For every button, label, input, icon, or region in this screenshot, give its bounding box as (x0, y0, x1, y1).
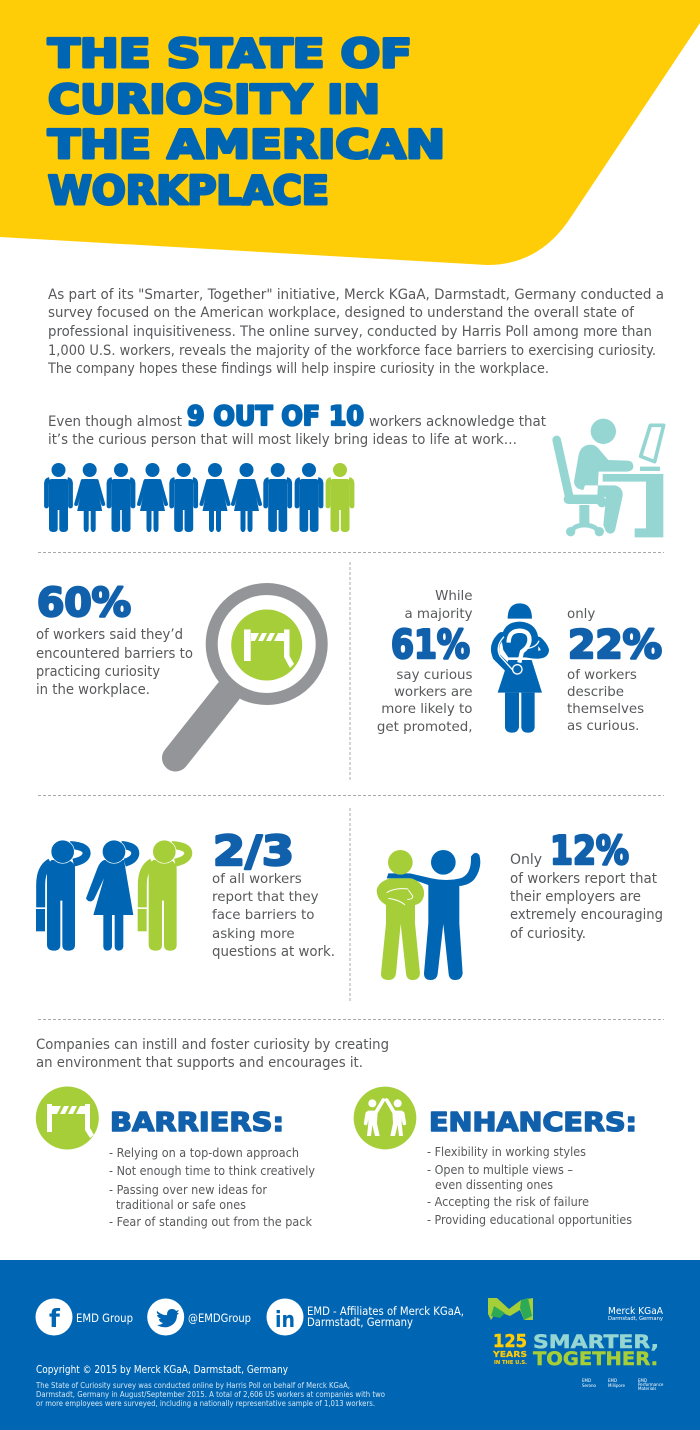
panel: 61% and 22%: 22% (568, 623, 662, 668)
logo: Merck KGaA wordmark: Darmstadt, Germany (608, 1316, 663, 1322)
icon: magnifying glass with barrier (176, 589, 322, 758)
survey note (35, 1381, 385, 1408)
social: Twitter: @EMDGroup (188, 1311, 251, 1325)
panel: 60% encountered barriers: encountered barriers to (36, 646, 193, 662)
panel: 61% and 22%: themselves (567, 702, 644, 717)
panel: 61% and 22% (377, 589, 662, 735)
logo: Merck KGaA wordmark (608, 1306, 663, 1322)
panel: 60% encountered barriers: of workers said they’d (36, 627, 183, 643)
copyright: Copyright © 2015 by Merck KGaA, Darmstadt, Germany (36, 1364, 288, 1376)
footer panel (0, 1260, 700, 1430)
survey note: The State of Curiosity survey was conducted online by Harris Poll on behalf of Merck KGaA, (35, 1381, 350, 1390)
panel: 61% and 22%: only (567, 607, 595, 622)
section intro text: Companies can instill and foster curiosity by creating (36, 1037, 389, 1053)
icon: two colleagues (377, 850, 480, 980)
panel: barriers: traditional or safe ones (116, 1197, 246, 1212)
logo: business sectors: EMD (638, 1378, 647, 1383)
statement: 9 out of 10: Even though almost (48, 414, 182, 430)
panel: enhancers: even dissenting ones (435, 1177, 553, 1192)
social: Twitter (147, 1298, 251, 1336)
statement: 9 out of 10 (48, 401, 546, 448)
logo: business sectors: EMD (608, 1378, 617, 1383)
panel: 61% and 22%: more likely to (381, 702, 472, 717)
intro paragraph: The company hopes these findings will help inspire curiosity in the workplace. (47, 361, 549, 377)
panel: barriers: - Not enough time to think creatively (109, 1163, 316, 1178)
panel: enhancers (354, 1087, 637, 1227)
logo: Merck KGaA wordmark: Merck KGaA (608, 1306, 663, 1317)
panel: 2/3 of workers: 2/3 (213, 827, 294, 875)
panel: 60% encountered barriers: 60% (37, 581, 131, 626)
intro paragraph: survey focused on the American workplace, designed to understand the overall state of (48, 305, 635, 321)
title: THE AMERICAN (48, 123, 445, 168)
statement: 9 out of 10: it’s the curious person that will most likely bring ideas to life at work… (48, 432, 517, 448)
panel: enhancers: - Flexibility in working styles (427, 1144, 586, 1159)
logo: Smarter, Together.: SMARTER, (533, 1331, 659, 1353)
social: LinkedIn: EMD - Affiliates of Merck KGaA, (307, 1304, 464, 1318)
panel: 60% encountered barriers: practicing curiosity (36, 664, 160, 680)
social: Facebook (36, 1298, 133, 1336)
panel: 61% and 22%: say curious (396, 668, 473, 683)
logo: business sectors: Serono (582, 1383, 597, 1388)
survey note: Darmstadt, Germany in August/September 2015. A total of 2,606 US workers at companies with two (36, 1390, 385, 1399)
panel: barriers: - Passing over new ideas for (109, 1182, 268, 1197)
social: LinkedIn: Darmstadt, Germany (307, 1315, 413, 1329)
icon: woman with question mark (495, 603, 545, 733)
panel: only 12%: Only (510, 852, 542, 868)
logo: 125 years in the U.S.: IN THE U.S. (494, 1360, 527, 1366)
panel: only 12%: of workers report that (510, 871, 657, 887)
icon: row of ten people (46, 463, 352, 532)
survey note: or more employees were surveyed, including a nationally representative sample of 1,013 workers. (36, 1399, 375, 1408)
title: WORKPLACE (48, 169, 329, 214)
panel: 61% and 22%: of workers (567, 668, 637, 683)
panel: 60% encountered barriers: in the workplace. (36, 682, 150, 698)
intro paragraph: As part of its "Smarter, Together" initiative, Merck KGaA, Darmstadt, Germany conducted a (48, 287, 664, 303)
social: Facebook: EMD Group (76, 1311, 133, 1325)
panel: only 12%: 12% (550, 829, 629, 874)
logo: business sectors: Performance (638, 1382, 664, 1387)
section intro text: an environment that supports and encourages it. (36, 1055, 363, 1071)
logo: business sectors: Millipore (608, 1383, 625, 1388)
social: LinkedIn: in (275, 1308, 295, 1333)
panel: 2/3 of workers: of all workers (212, 872, 302, 887)
panel: 61% and 22%: get promoted, (377, 720, 472, 735)
logo: Smarter, Together. (533, 1331, 659, 1370)
panel: 2/3 of workers: report that they (212, 890, 319, 905)
logo: business sectors (582, 1378, 664, 1391)
logo: business sectors: EMD (582, 1378, 591, 1383)
panel: only 12%: their employers are (510, 889, 641, 905)
social: LinkedIn (266, 1298, 464, 1336)
panel: enhancers: - Accepting the risk of failure (427, 1194, 589, 1209)
panel: barriers: BARRIERS: (110, 1108, 284, 1138)
icon: person at computer desk (557, 419, 664, 537)
panel: barriers: - Fear of standing out from the pack (109, 1214, 313, 1229)
panel: 2/3 of workers: asking more (212, 927, 295, 942)
section intro text (36, 1037, 389, 1071)
dashed dividers (38, 552, 664, 1020)
title: THE STATE OF (48, 32, 412, 77)
logo: 125 years in the U.S.: YEARS (492, 1350, 527, 1359)
statement: 9 out of 10: 9 OUT OF 10 (187, 401, 364, 432)
figure: man with briefcase (36, 840, 87, 951)
panel: barriers: - Relying on a top-down approach (109, 1145, 299, 1160)
figure: green man with briefcase (138, 840, 188, 951)
intro paragraph: 1,000 U.S. workers, reveals the majority of the workforce face barriers to exercising curiosity. (48, 343, 656, 359)
panel: 2/3 of workers (36, 827, 335, 960)
intro paragraph (47, 287, 664, 377)
panel: 60% encountered barriers (36, 581, 322, 758)
logo: Smarter, Together.: TOGETHER. (533, 1348, 658, 1370)
logo: M mark (488, 1298, 533, 1320)
icon: three puzzled workers (36, 840, 188, 951)
logo: 125 years in the U.S. (492, 1331, 527, 1366)
social: Facebook: f (49, 1304, 61, 1333)
panel: 61% and 22%: While (435, 589, 472, 604)
panel: 2/3 of workers: face barriers to (212, 908, 314, 923)
title (48, 32, 445, 214)
icon: high-five badge (354, 1087, 416, 1149)
panel: enhancers: - Open to multiple views – (427, 1162, 573, 1177)
panel: enhancers: - Providing educational opportunities (427, 1212, 632, 1227)
panel: only 12% (377, 829, 663, 980)
panel: 61% and 22%: 61% (391, 623, 470, 668)
panel: enhancers: ENHANCERS: (429, 1108, 637, 1138)
logo: 125 years in the U.S.: 125 (493, 1331, 527, 1352)
panel: only 12%: extremely encouraging (510, 907, 663, 923)
panel: 61% and 22%: workers are (394, 685, 472, 700)
panel: 2/3 of workers: questions at work. (212, 944, 335, 960)
intro paragraph: professional inquisitiveness. The online survey, conducted by Harris Poll among more than (48, 324, 652, 340)
header yellow banner (0, 0, 700, 265)
panel: 61% and 22%: a majority (404, 607, 473, 622)
figure: woman (86, 840, 135, 951)
panel: barriers (36, 1086, 316, 1229)
logo: business sectors: Materials (638, 1386, 656, 1391)
icon: barrier badge (36, 1086, 99, 1150)
panel: only 12%: of curiosity. (510, 926, 586, 942)
panel: 61% and 22%: as curious. (567, 719, 639, 734)
panel: 61% and 22%: describe (567, 685, 624, 700)
title: CURIOSITY IN (48, 78, 380, 123)
statement: 9 out of 10: workers acknowledge that (369, 414, 546, 430)
